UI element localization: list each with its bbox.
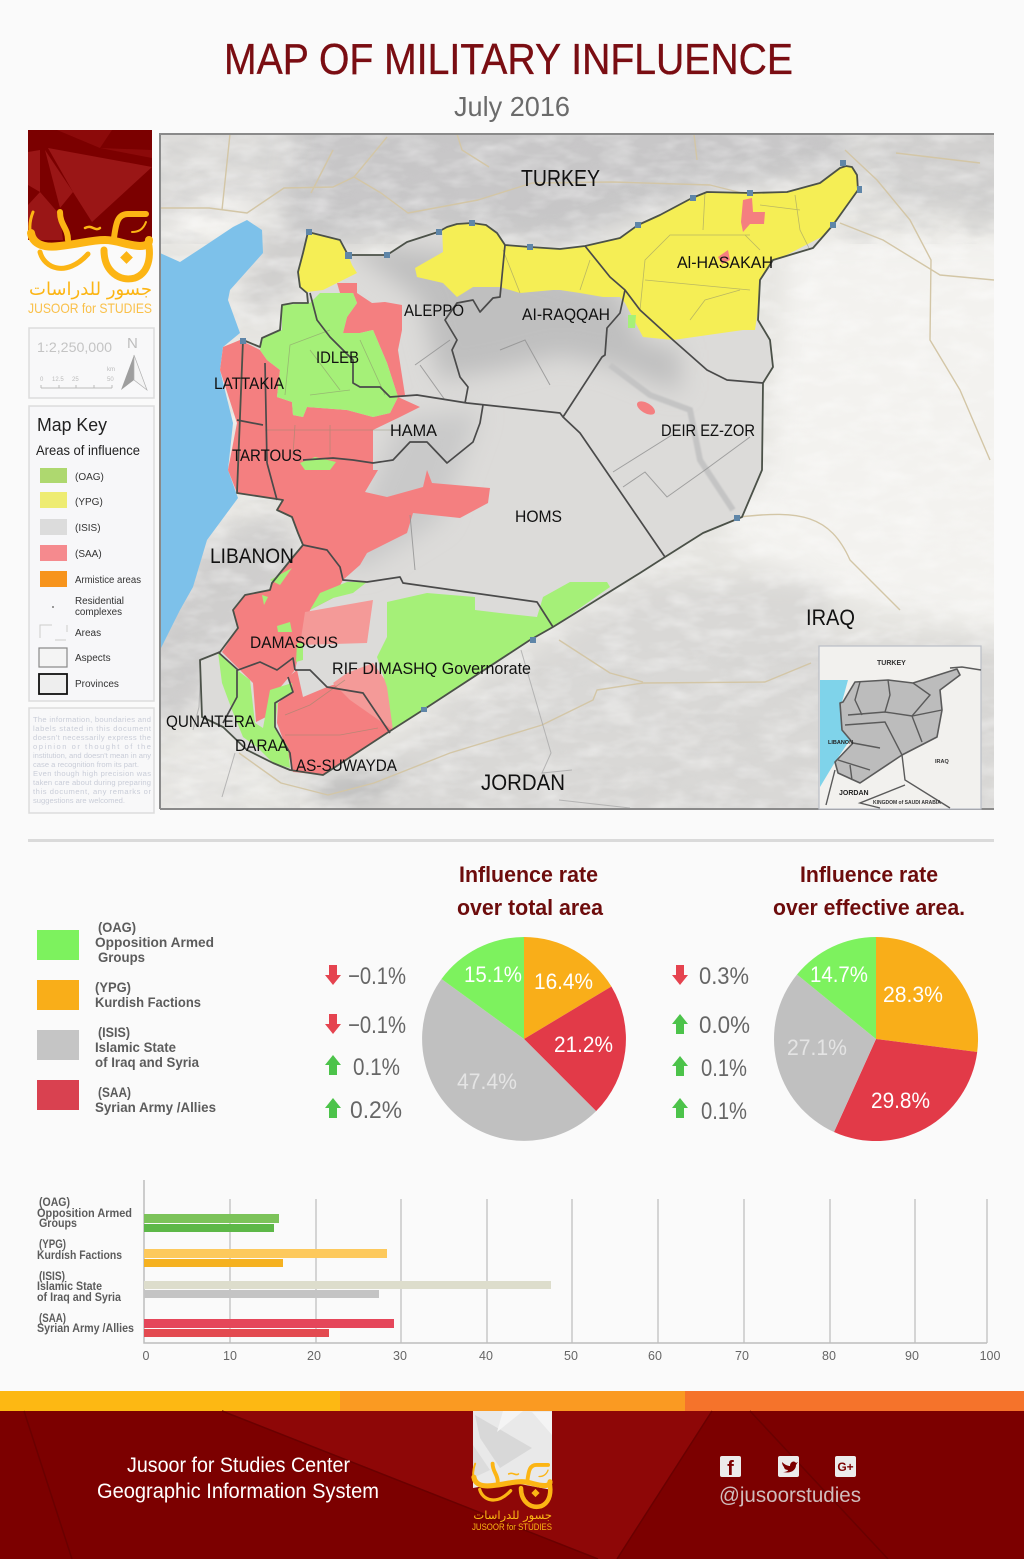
panel: map scale and north arrow: 25 bbox=[72, 377, 79, 383]
panel: map key: Areas of influence bbox=[36, 443, 140, 458]
bar chart axis values: 50 bbox=[564, 1349, 578, 1363]
legend row ISIS: (ISIS) bbox=[98, 1024, 130, 1040]
icon: facebook: f bbox=[727, 1458, 734, 1480]
legend item YPG: (YPG) bbox=[75, 497, 103, 508]
map labels: DAMASCUS bbox=[250, 634, 338, 652]
panel: disclaimer note: taken care about during preparing bbox=[33, 778, 151, 787]
inset locator map: LIBANON bbox=[828, 740, 853, 746]
change indicators: effective area: 0.1% bbox=[701, 1098, 747, 1125]
outer Syria border bbox=[200, 166, 858, 775]
bar chart row labels: (OAG) bbox=[39, 1195, 70, 1209]
bar chart axis values: 0 bbox=[143, 1349, 150, 1363]
section divider bbox=[28, 839, 994, 842]
legend row ISIS bbox=[37, 1024, 199, 1070]
bar chart row labels: (YPG) bbox=[39, 1237, 66, 1251]
legend row SAA bbox=[37, 1080, 216, 1115]
inset locator map: JORDAN bbox=[839, 790, 869, 797]
legend: factions bbox=[37, 919, 216, 1115]
bars YPG bbox=[144, 1249, 387, 1267]
legend row ISIS: of Iraq and Syria bbox=[95, 1054, 199, 1070]
legend item OAG: (OAG) bbox=[75, 472, 104, 483]
change indicators: total area: −0.1% bbox=[348, 963, 406, 990]
change indicators: total area: 0.1% bbox=[353, 1054, 400, 1081]
map labels: TARTOUS bbox=[232, 447, 302, 465]
map of Syria bbox=[159, 133, 994, 810]
arrow down bbox=[325, 965, 341, 985]
bar chart row labels: of Iraq and Syria bbox=[37, 1290, 121, 1304]
roads and outer borders bbox=[160, 134, 994, 795]
arrow up bbox=[672, 1056, 688, 1076]
arrow up bbox=[325, 1098, 341, 1118]
bar chart axis values: 30 bbox=[393, 1349, 407, 1363]
bar chart bbox=[37, 1180, 1000, 1363]
map base terrain bbox=[161, 135, 994, 808]
inset locator map: KINGDOM of SAUDI ARABIA bbox=[873, 800, 941, 806]
panel: map scale and north arrow: 12.5 bbox=[52, 377, 64, 383]
bar chart row labels: Kurdish Factions bbox=[37, 1248, 122, 1262]
heading: influence over effective area bbox=[773, 862, 965, 920]
panel: disclaimer note: case a recognition from its part. bbox=[33, 760, 139, 769]
change indicators: total area: −0.1% bbox=[348, 1012, 406, 1039]
panel: map scale and north arrow: 0 bbox=[40, 377, 44, 383]
panel: map scale and north arrow: 50 bbox=[107, 377, 114, 383]
map labels: HOMS bbox=[515, 508, 562, 526]
bar chart row labels: (ISIS) bbox=[39, 1269, 65, 1283]
bars ISIS bbox=[144, 1281, 551, 1298]
logo: Jusoor for Studies: JUSOOR for STUDIES bbox=[28, 300, 152, 316]
bar chart axis values: 100 bbox=[980, 1349, 1000, 1363]
territory: SAA bbox=[220, 283, 490, 775]
bar chart axis values: 70 bbox=[735, 1349, 749, 1363]
logo: Jusoor for Studies bbox=[28, 130, 152, 316]
bar chart axis values: 90 bbox=[905, 1349, 919, 1363]
territory: YPG bbox=[295, 160, 865, 340]
heading: influence over total area bbox=[457, 862, 603, 920]
arrow up bbox=[672, 1014, 688, 1034]
legend row OAG: Opposition Armed bbox=[95, 934, 214, 950]
map labels: IDLEB bbox=[316, 349, 359, 367]
footer text: Jusoor for Studies Center bbox=[127, 1454, 350, 1477]
legend item ISIS bbox=[40, 519, 101, 535]
icon: google plus bbox=[835, 1456, 856, 1477]
bar chart axis values: 80 bbox=[822, 1349, 836, 1363]
bar chart axis values: 60 bbox=[648, 1349, 662, 1363]
social handle: @jusoorstudies bbox=[719, 1484, 861, 1507]
panel: disclaimer note: suggestions are welcomed. bbox=[33, 796, 125, 805]
bar chart axis values: 10 bbox=[223, 1349, 237, 1363]
panel: disclaimer note bbox=[29, 708, 154, 813]
thin sub-district boundaries bbox=[265, 192, 810, 735]
legend row ISIS: Islamic State bbox=[95, 1039, 176, 1055]
legend item SAA: (SAA) bbox=[75, 549, 102, 560]
legend row YPG: (YPG) bbox=[95, 979, 131, 995]
heading: influence over total area: Influence rate bbox=[459, 862, 598, 887]
change indicators: effective area: 0.0% bbox=[699, 1012, 750, 1039]
legend item YPG bbox=[40, 492, 103, 508]
map labels: LATTAKIA bbox=[214, 375, 284, 393]
panel: disclaimer note: Even though high precision was bbox=[33, 769, 151, 778]
sea bbox=[160, 220, 263, 650]
legend item armistice: Armistice areas bbox=[75, 575, 141, 586]
map labels: AS-SUWAYDA bbox=[296, 757, 397, 775]
panel: disclaimer note: institution, and doesn't mean in any bbox=[33, 751, 151, 760]
footer panel bbox=[0, 1411, 1024, 1559]
arrow down bbox=[672, 965, 688, 985]
panel: map scale and north arrow: 1:2,250,000 bbox=[37, 339, 112, 355]
change indicators: effective area: 0.3% bbox=[699, 963, 749, 990]
legend row OAG bbox=[37, 919, 214, 965]
map labels: JORDAN bbox=[481, 770, 565, 795]
map labels: TURKEY bbox=[521, 165, 600, 191]
map labels: HAMA bbox=[390, 422, 437, 440]
legend item residential: complexes bbox=[75, 607, 122, 618]
legend item areas: Areas bbox=[75, 628, 101, 639]
footer logo bbox=[472, 1411, 552, 1532]
map labels: DARAA bbox=[235, 737, 288, 755]
map labels: ALEPPO bbox=[404, 302, 464, 320]
map labels: QUNAITERA bbox=[166, 713, 255, 731]
bar chart axis values: 20 bbox=[307, 1349, 321, 1363]
terrain mottling bbox=[160, 134, 994, 809]
pie chart: effective area bbox=[774, 937, 978, 1141]
change indicators: effective area: 0.1% bbox=[701, 1055, 747, 1082]
pie chart: total area: 16.4% bbox=[534, 969, 593, 994]
bar chart row labels: Islamic State bbox=[37, 1279, 102, 1293]
legend item aspects: Aspects bbox=[75, 653, 111, 664]
legend row OAG: Groups bbox=[98, 949, 145, 965]
legend row YPG bbox=[37, 979, 201, 1010]
legend item provinces bbox=[39, 674, 119, 694]
footer colour stripes bbox=[0, 1391, 1024, 1411]
legend item residential bbox=[52, 596, 124, 618]
heading: influence over total area: over total area bbox=[457, 895, 603, 920]
bar chart axis values: 40 bbox=[479, 1349, 493, 1363]
change indicators: total area bbox=[325, 963, 406, 1124]
legend item armistice bbox=[40, 571, 141, 587]
pie chart: effective area: 28.3% bbox=[883, 982, 943, 1007]
panel: disclaimer note: doesn't necessarily express the bbox=[33, 733, 151, 742]
map labels: IRAQ bbox=[806, 605, 855, 630]
territory: OAG bbox=[218, 293, 636, 768]
arrow up bbox=[672, 1098, 688, 1118]
bar chart row labels: Opposition Armed bbox=[37, 1206, 132, 1220]
bars OAG bbox=[144, 1214, 279, 1232]
legend item residential: Residential bbox=[75, 596, 124, 607]
inset locator map bbox=[819, 646, 981, 809]
border crossing markers bbox=[240, 160, 862, 712]
footer text bbox=[97, 1454, 379, 1503]
legend item SAA bbox=[40, 545, 102, 561]
footer logo: جسور للدراسات bbox=[473, 1508, 552, 1523]
map labels: Al-HASAKAH bbox=[677, 254, 773, 272]
pie chart: effective area: 27.1% bbox=[787, 1035, 847, 1060]
title: MAP OF MILITARY INFLUENCE bbox=[224, 35, 793, 84]
panel: disclaimer note: The information, boundaries and bbox=[33, 715, 151, 724]
heading: influence over effective area: over effective area. bbox=[773, 895, 965, 920]
bar chart row labels: (SAA) bbox=[39, 1311, 66, 1325]
bar chart row labels bbox=[37, 1195, 134, 1335]
panel: disclaimer note: opinion or thought of the bbox=[33, 742, 151, 751]
map frame bbox=[160, 134, 994, 809]
inset locator map: IRAQ bbox=[935, 759, 949, 765]
pie chart: total area: 47.4% bbox=[457, 1069, 517, 1094]
pie chart: total area: 21.2% bbox=[554, 1032, 613, 1057]
legend item provinces: Provinces bbox=[75, 679, 119, 690]
pie chart: effective area: 14.7% bbox=[810, 962, 868, 987]
inset locator map: TURKEY bbox=[877, 660, 906, 667]
pie chart: effective area: 29.8% bbox=[871, 1088, 930, 1113]
panel: map scale and north arrow bbox=[29, 328, 154, 398]
arrow up bbox=[325, 1055, 341, 1075]
legend row SAA: Syrian Army /Allies bbox=[95, 1099, 216, 1115]
icon: facebook bbox=[720, 1456, 741, 1480]
arrow down bbox=[325, 1014, 341, 1034]
legend item ISIS: (ISIS) bbox=[75, 523, 101, 534]
subtitle: July 2016 bbox=[454, 91, 570, 122]
legend row YPG: Kurdish Factions bbox=[95, 994, 201, 1010]
footer text: Geographic Information System bbox=[97, 1480, 379, 1503]
change indicators: effective area bbox=[672, 963, 750, 1125]
territory: SAA small pockets in the north and east bbox=[635, 198, 765, 417]
logo: Jusoor for Studies: جسور للدراسات bbox=[29, 279, 152, 300]
icon: twitter bbox=[778, 1456, 799, 1477]
heading: influence over effective area: Influence rate bbox=[800, 862, 938, 887]
map labels bbox=[166, 165, 855, 795]
legend row OAG: (OAG) bbox=[98, 919, 136, 935]
pie chart: total area bbox=[422, 937, 626, 1141]
icon: google plus: G+ bbox=[837, 1460, 854, 1474]
map labels: AI-RAQQAH bbox=[522, 306, 610, 324]
panel: map scale and north arrow: km bbox=[107, 367, 115, 373]
map labels: LIBANON bbox=[210, 545, 294, 568]
territory: ISIS bbox=[201, 238, 820, 766]
panel: map key: Map Key bbox=[37, 415, 107, 435]
bar chart row labels: Groups bbox=[39, 1216, 77, 1230]
map labels: DEIR EZ-ZOR bbox=[661, 422, 755, 440]
change indicators: total area: 0.2% bbox=[350, 1097, 402, 1124]
bars SAA bbox=[144, 1319, 394, 1337]
panel: map scale and north arrow: N bbox=[127, 335, 138, 352]
province boundaries bbox=[218, 245, 763, 770]
pie chart: total area: 15.1% bbox=[464, 962, 522, 987]
panel: map key bbox=[29, 406, 154, 701]
legend item areas bbox=[40, 625, 101, 640]
legend item OAG bbox=[40, 468, 104, 483]
bar chart axis values bbox=[143, 1349, 1000, 1363]
panel: disclaimer note: labels stated in this document bbox=[33, 724, 152, 733]
map labels: RIF DIMASHQ Governorate bbox=[332, 660, 531, 678]
footer logo: JUSOOR for STUDIES bbox=[472, 1522, 552, 1532]
panel: disclaimer note: this document, any remarks or bbox=[33, 787, 151, 796]
legend item aspects bbox=[39, 648, 111, 667]
bar chart row labels: Syrian Army /Allies bbox=[37, 1321, 134, 1335]
legend row SAA: (SAA) bbox=[98, 1084, 131, 1100]
